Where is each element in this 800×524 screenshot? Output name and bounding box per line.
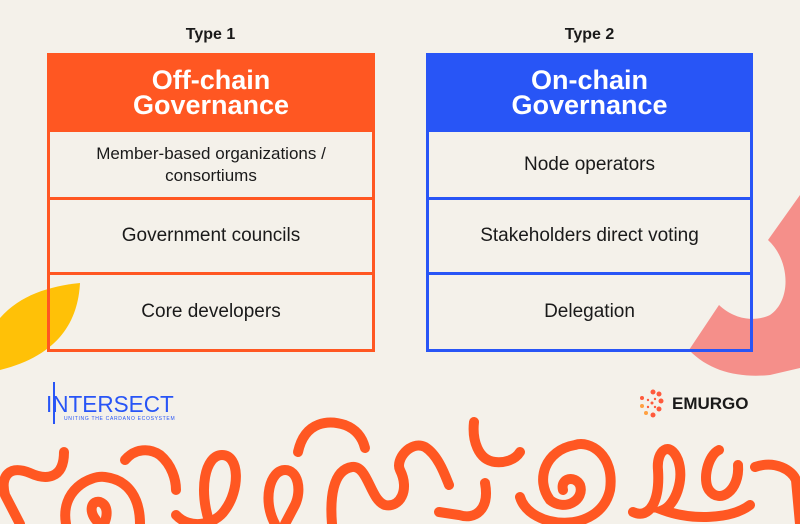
heading: on-chain bbox=[429, 56, 750, 129]
shape: yellow leaf bbox=[0, 283, 80, 370]
logo: emurgo bbox=[640, 390, 748, 418]
row 2 bbox=[50, 197, 372, 272]
row 3: Delegation bbox=[544, 301, 635, 322]
panel: off-chain governance bbox=[47, 53, 375, 352]
row 2: Government councils bbox=[122, 225, 300, 246]
heading: on-chain: Governance bbox=[511, 90, 668, 120]
row 2: Stakeholders direct voting bbox=[480, 225, 699, 246]
row 1 bbox=[50, 129, 372, 197]
row 3 bbox=[50, 272, 372, 349]
logo: intersect: UNITING THE CARDANO ECOSYSTEM bbox=[64, 416, 175, 422]
logo: intersect bbox=[46, 382, 175, 424]
heading: on-chain: On-chain bbox=[531, 64, 648, 94]
row 1: consortiums bbox=[165, 166, 257, 184]
logo: intersect: INTERSECT bbox=[46, 391, 174, 417]
squiggles bbox=[4, 422, 800, 524]
panel: on-chain governance bbox=[426, 53, 753, 352]
label: type 2: Type 2 bbox=[565, 26, 614, 43]
heading: off-chain bbox=[50, 56, 372, 129]
logo: emurgo: EMURGO bbox=[672, 394, 748, 413]
row 1 bbox=[429, 129, 750, 197]
shape: pink ring segment bbox=[689, 195, 800, 376]
row 3: Core developers bbox=[141, 301, 281, 322]
row 2 bbox=[429, 197, 750, 272]
label: type 1: Type 1 bbox=[186, 26, 235, 43]
row 1: Member-based organizations / bbox=[96, 144, 326, 162]
row 1: Node operators bbox=[524, 154, 655, 174]
heading: off-chain: Off-chain bbox=[152, 64, 270, 94]
row 3 bbox=[429, 272, 750, 349]
heading: off-chain: Governance bbox=[133, 90, 289, 120]
